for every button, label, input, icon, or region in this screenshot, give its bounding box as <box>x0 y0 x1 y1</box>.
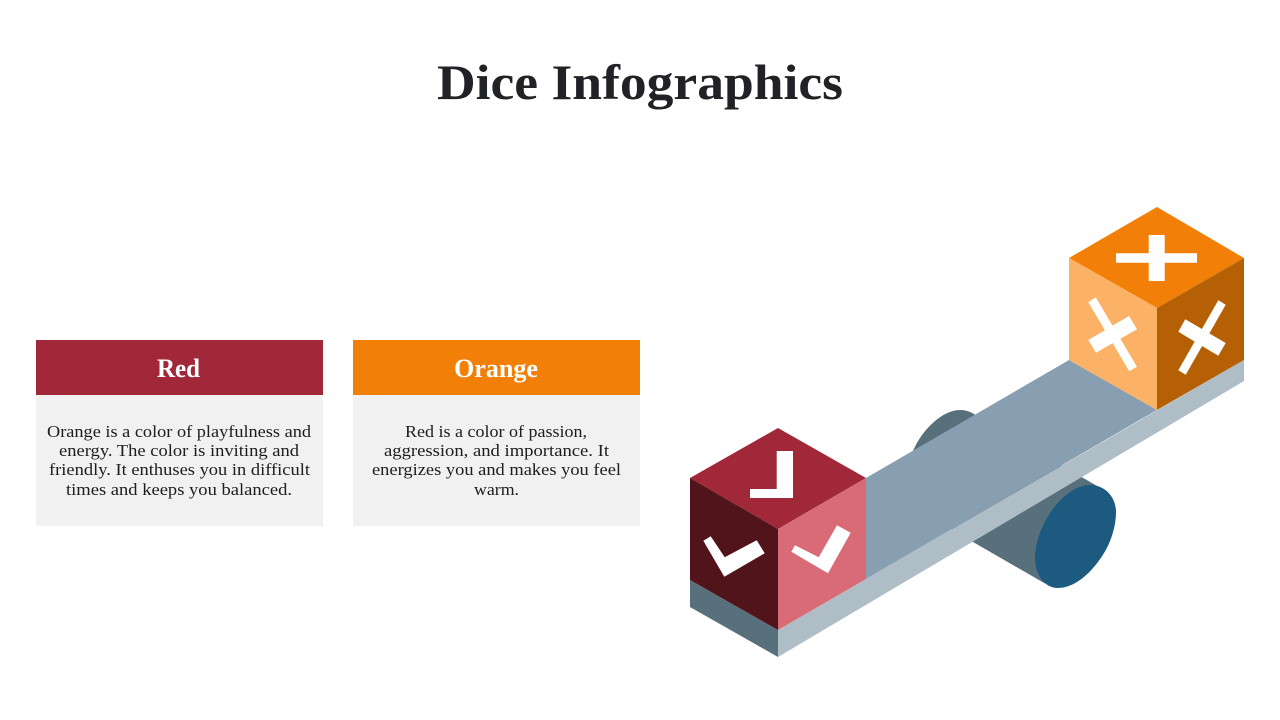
orange panel text block: energizes you and makes you feel <box>372 460 621 479</box>
red panel text block: energy. The color is inviting and <box>59 441 300 460</box>
orange die with crosses <box>1069 207 1244 410</box>
panel: orange <box>353 340 640 526</box>
red panel header: Red <box>157 354 201 383</box>
icon: check on right face <box>791 525 851 573</box>
orange panel header: Orange <box>454 354 538 383</box>
icon: cross on right face <box>1178 300 1226 375</box>
icon: check on left face <box>703 536 765 577</box>
red panel header <box>36 340 323 395</box>
red panel text block: times and keeps you balanced. <box>66 480 292 499</box>
icon: check on top face <box>750 451 793 498</box>
red panel text block <box>36 395 323 526</box>
orange panel text block: aggression, and importance. It <box>384 441 609 460</box>
icon: cross on left face <box>1088 297 1137 371</box>
red panel text block: friendly. It enthuses you in difficult <box>49 460 310 479</box>
seesaw illustration <box>690 207 1244 657</box>
title: Dice Infographics <box>437 54 843 110</box>
red die with check marks <box>690 428 866 630</box>
orange panel text block: warm. <box>474 480 519 499</box>
orange panel text block: Red is a color of passion, <box>405 422 587 441</box>
panel: red <box>36 340 323 526</box>
cylinder pivot <box>905 410 1116 588</box>
orange panel text block <box>353 395 640 526</box>
icon: cross on top face <box>1116 235 1197 281</box>
seesaw plank <box>690 360 1244 657</box>
red panel text block: Orange is a color of playfulness and <box>47 422 312 441</box>
orange panel header <box>353 340 640 395</box>
